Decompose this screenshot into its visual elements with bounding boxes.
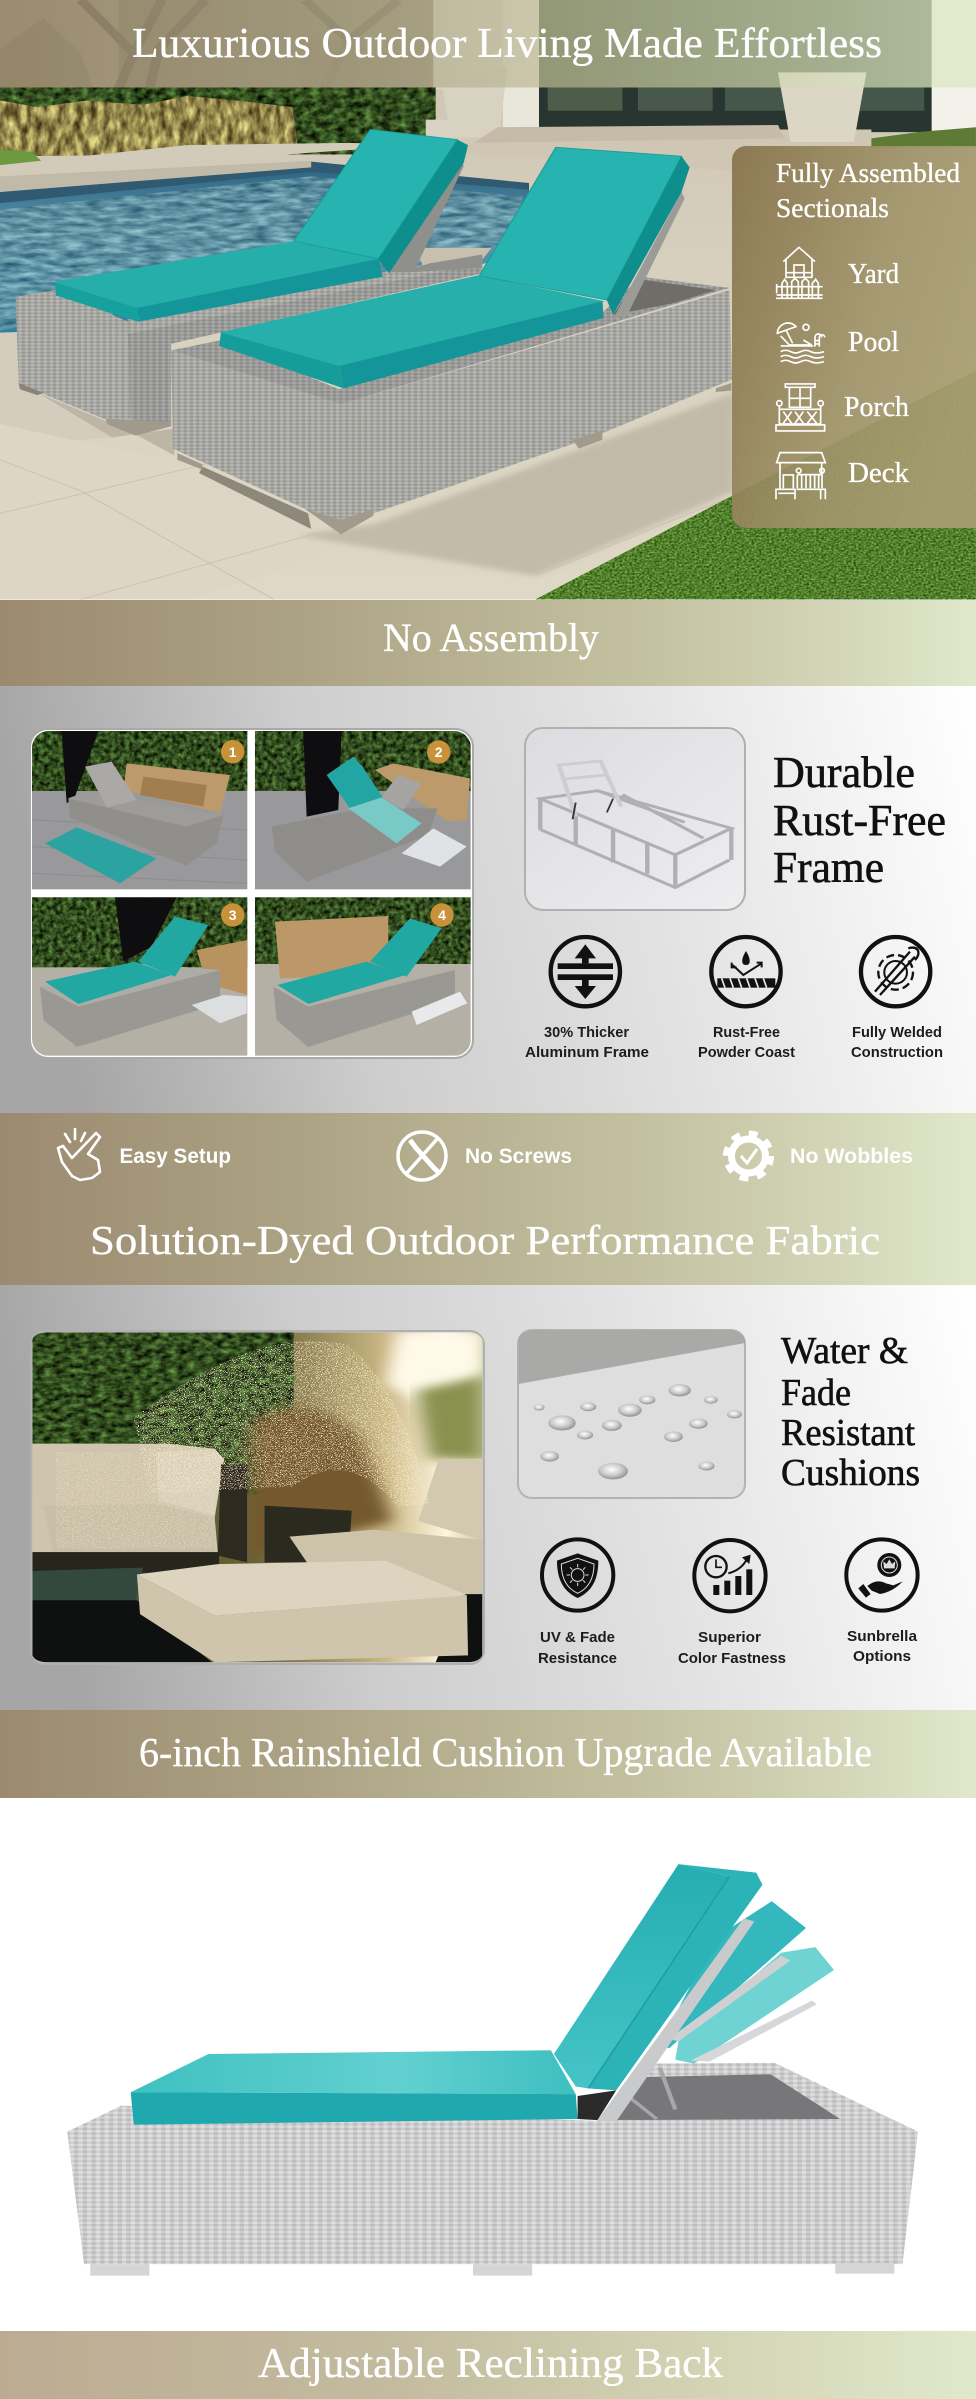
icon: fully welded [861,937,930,1006]
heading: water and fade resistant cushions: Fade [781,1372,851,1414]
icon: color fastness [694,1540,766,1611]
label: uv and fade: UV & Fade [540,1629,615,1646]
collage: four assembly step photos [30,729,473,1058]
photo step 1 [32,731,247,889]
heading: durable rust-free frame: Rust-Free [773,796,946,845]
label: sunbrella options [847,1628,918,1665]
heading: water and fade resistant cushions: Water & [781,1330,908,1372]
label: color fastness [678,1629,786,1667]
label: color fastness: Superior [698,1629,761,1646]
label: fully welded: Construction [851,1044,943,1061]
label: sunbrella options: Sunbrella [847,1628,918,1645]
label: color fastness: Color Fastness [678,1650,786,1667]
icon: no wobbles [726,1134,770,1178]
label: fully welded [851,1024,943,1061]
panel heading [776,158,961,223]
band: setup benefits and fabric heading [0,1113,976,1285]
label: sunbrella options: Options [853,1648,911,1665]
photo step 4 [255,897,471,1056]
hero title: Luxurious Outdoor Living Made Effortless [132,21,882,67]
step badge 2 [427,740,450,764]
section background [0,686,976,1113]
icon: sunbrella [846,1539,918,1611]
icon: deck [776,453,826,499]
label: thicker frame: 30% Thicker [544,1024,629,1041]
product photo: lounger with adjustable back [67,1864,918,2276]
label: thicker frame: Aluminum Frame [525,1044,649,1061]
label: pool: Pool [848,326,899,358]
heading: durable rust-free frame: Durable [773,748,915,797]
label: deck: Deck [848,457,909,489]
label: no screws: No Screws [465,1145,572,1168]
section: assembly steps and frame [0,686,976,1113]
section: water and fade resistance [0,1285,976,1710]
photo step 3 [32,897,247,1056]
band: rainshield upgrade: 6-inch Rainshield Cushion Upgrade Available [139,1729,872,1775]
icon: uv shield [542,1539,613,1611]
icon: yard [776,247,823,298]
label: porch: Porch [844,391,909,423]
icon: pool [777,323,825,363]
label: powder coat: Powder Coast [698,1044,795,1061]
label: powder coat: Rust-Free [713,1024,780,1041]
step badge 4 [430,903,454,927]
icon: thicker frame [551,937,620,1006]
label: easy setup: Easy Setup [120,1145,231,1168]
icon: no screws [398,1132,446,1180]
step badge 1: 1 [229,744,237,760]
back lounger [16,129,482,436]
swatch: water beading on fabric [518,1330,745,1498]
heading: durable rust-free frame: Frame [773,843,884,892]
icon: powder coat [711,937,781,1006]
step badge 3 [221,903,244,927]
panel: fully assembled sectionals [732,146,976,528]
band: adjustable reclining back: Adjustable Reclining Back [258,2341,723,2387]
back cushion [554,1864,762,2122]
heading: water and fade resistant cushions: Resistant [781,1412,915,1454]
step badge 3: 3 [229,907,237,923]
label: thicker frame [525,1024,649,1061]
band: no assembly: No Assembly [383,615,599,660]
band: no assembly [0,600,976,686]
band: rainshield upgrade [0,1710,976,1798]
panel background [732,146,976,528]
panel heading: Fully Assembled [776,158,961,188]
label: no wobbles: No Wobbles [790,1145,913,1168]
label: fully welded: Fully Welded [852,1024,942,1041]
photo step 2 [255,731,471,889]
seat cushion [131,2050,578,2125]
icon: easy setup [58,1129,100,1180]
photo: water spray on outdoor cushions [31,1331,484,1664]
section background [0,1285,976,1710]
frame card with aluminum frame illustration [525,728,745,910]
heading: water and fade resistant cushions [781,1330,920,1494]
label: yard: Yard [848,258,899,290]
hero photo: two teal loungers by the pool [0,0,976,600]
step badge 1 [221,740,244,763]
step badge 2: 2 [435,744,443,760]
heading: durable rust-free frame [773,748,946,892]
wicker base [67,2063,918,2276]
label: powder coat [698,1024,795,1061]
label: uv and fade: Resistance [538,1650,617,1667]
step badge 4: 4 [438,907,446,923]
hero backdrop: wall, plants, pool and deck [0,0,976,600]
panel heading: Sectionals [776,193,889,223]
band: adjustable reclining back [0,2331,976,2399]
icon: porch [776,384,825,431]
front lounger [171,147,732,534]
title band overlay [0,0,932,88]
label: uv and fade [538,1629,617,1667]
ghost recline positions [660,1901,834,2064]
heading: solution-dyed fabric: Solution-Dyed Outdoor Performance Fabric [90,1217,880,1263]
heading: water and fade resistant cushions: Cushions [781,1452,920,1494]
